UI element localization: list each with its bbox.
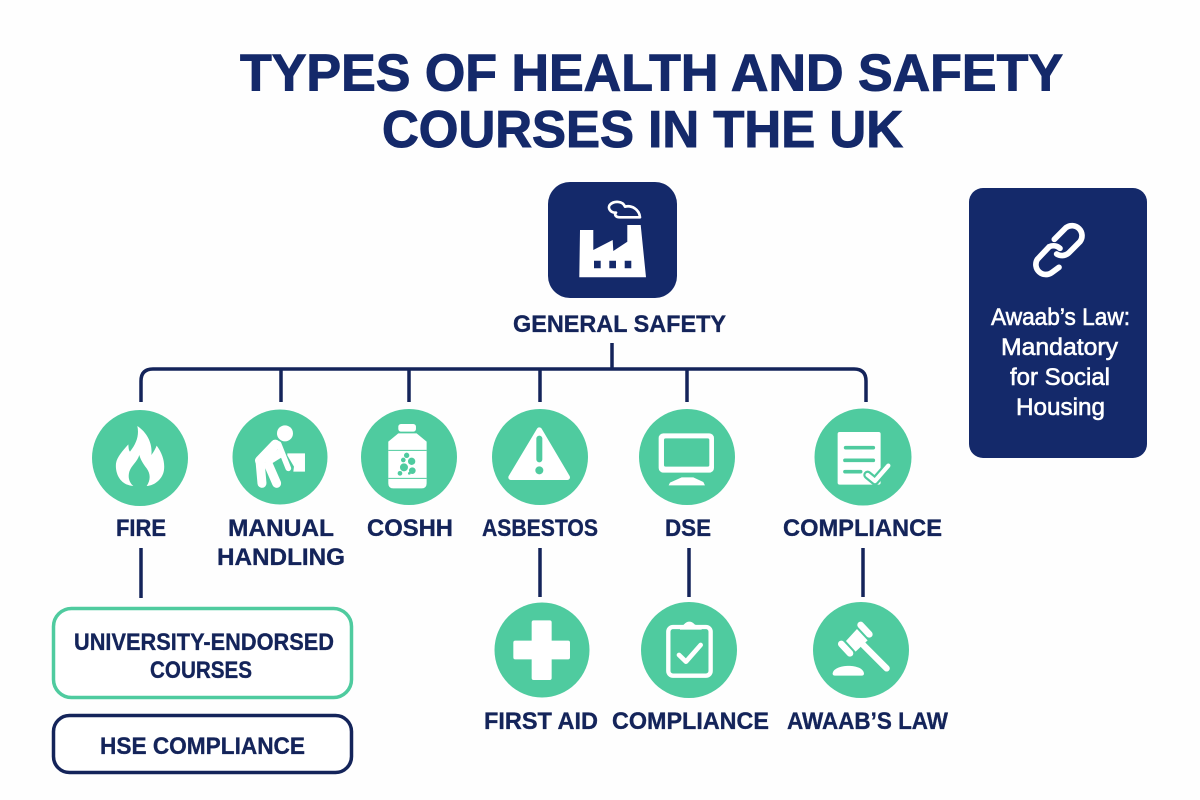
course: fire: FIRE [116, 515, 166, 542]
course: asbestos [482, 409, 598, 542]
course: awaab's law [787, 602, 948, 735]
box: hse compliance: HSE COMPLIANCE [100, 733, 305, 760]
course: asbestos: ASBESTOS [482, 515, 598, 542]
course: manual handling: HANDLING [217, 544, 345, 571]
course: coshh [361, 409, 457, 542]
box: university-endorsed courses: COURSES [150, 657, 252, 684]
course: dse: DSE [665, 515, 711, 542]
course: first aid: FIRST AID [484, 708, 598, 735]
box: university-endorsed courses: UNIVERSITY-ENDORSED [74, 629, 334, 656]
icon: factory [548, 182, 677, 298]
course: compliance checklist: COMPLIANCE [612, 708, 769, 735]
course: awaab's law: AWAAB’S LAW [787, 708, 948, 735]
course: compliance: COMPLIANCE [783, 515, 942, 542]
course: manual handling [217, 410, 345, 571]
course: coshh: COSHH [367, 515, 453, 542]
title [240, 44, 1063, 159]
course: compliance checklist [612, 602, 769, 735]
heading: general safety: GENERAL SAFETY [513, 311, 726, 338]
panel: awaab's law callout: for Social [1010, 364, 1110, 391]
panel: awaab's law callout: Mandatory [1001, 334, 1118, 361]
course: compliance [783, 408, 942, 542]
course: manual handling: MANUAL [228, 515, 334, 542]
box: university-endorsed courses [54, 608, 352, 698]
title: TYPES OF HEALTH AND SAFETY [240, 44, 1063, 102]
panel: awaab's law callout: Awaab’s Law: [991, 304, 1130, 331]
panel: awaab's law callout: Housing [1016, 394, 1105, 421]
course: fire [92, 410, 188, 542]
panel: awaab's law callout [969, 188, 1147, 458]
icon: chain link [1036, 226, 1082, 274]
connector tree [141, 343, 866, 402]
branch connectors [141, 548, 863, 598]
course: dse [639, 409, 735, 542]
box: hse compliance [54, 716, 352, 772]
title: COURSES IN THE UK [382, 101, 903, 159]
course: first aid [484, 602, 598, 735]
